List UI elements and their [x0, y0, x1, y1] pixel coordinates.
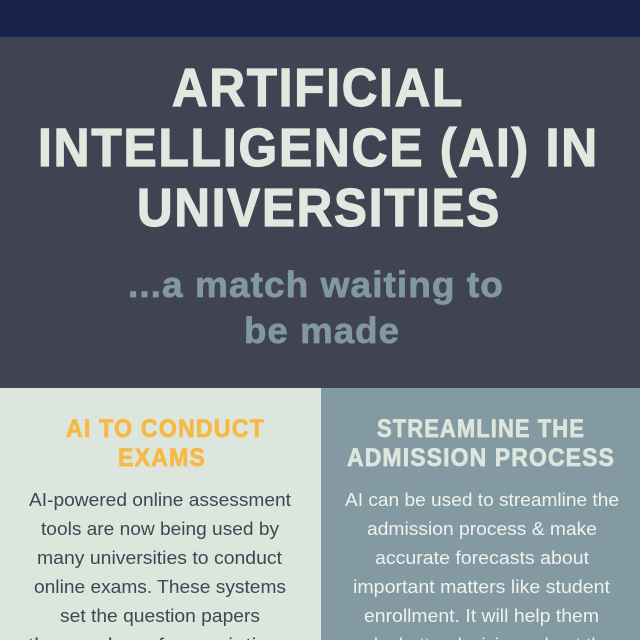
panel: AI to conduct exams: [0, 388, 321, 640]
body text: AI to conduct exams: tools are now being used by: [41, 518, 280, 539]
heading: AI to conduct exams: EXAMS: [118, 444, 206, 472]
heading: AI to conduct exams: [66, 415, 265, 472]
body text: streamline the admission process: AI can be used to streamline the: [345, 489, 619, 510]
body text: streamline the admission process: important matters like student: [353, 576, 610, 597]
subtitle: [128, 264, 504, 351]
title: [38, 58, 599, 238]
body text: AI to conduct exams: many universities to conduct: [37, 547, 282, 568]
subtitle: be made: [244, 310, 400, 351]
body text: streamline the admission process: admission process & make: [367, 518, 597, 539]
title: ARTIFICIAL: [172, 58, 464, 118]
body text: AI to conduct exams: AI-powered online assessment: [29, 489, 291, 510]
heading: AI to conduct exams: AI TO CONDUCT: [66, 415, 265, 443]
title: INTELLIGENCE (AI) IN: [38, 118, 599, 178]
header panel background: [0, 37, 640, 388]
body text: streamline the admission process: enrollment. It will help them: [364, 605, 599, 626]
title: UNIVERSITIES: [137, 178, 501, 238]
heading: streamline the admission process: ADMISSION PROCESS: [347, 444, 615, 472]
body text: streamline the admission process: [345, 489, 619, 640]
top navy band: [0, 0, 640, 37]
subtitle: ...a match waiting to: [128, 264, 504, 305]
body text: AI to conduct exams: online exams. These systems: [34, 576, 286, 597]
heading: streamline the admission process: STREAMLINE THE: [377, 415, 585, 443]
heading: streamline the admission process: [347, 415, 615, 472]
body text: streamline the admission process: accurate forecasts about: [375, 547, 589, 568]
body text: AI to conduct exams: [28, 489, 292, 640]
body text: AI to conduct exams: set the question papers: [60, 605, 260, 626]
panel: streamline the admission process: [321, 388, 640, 640]
